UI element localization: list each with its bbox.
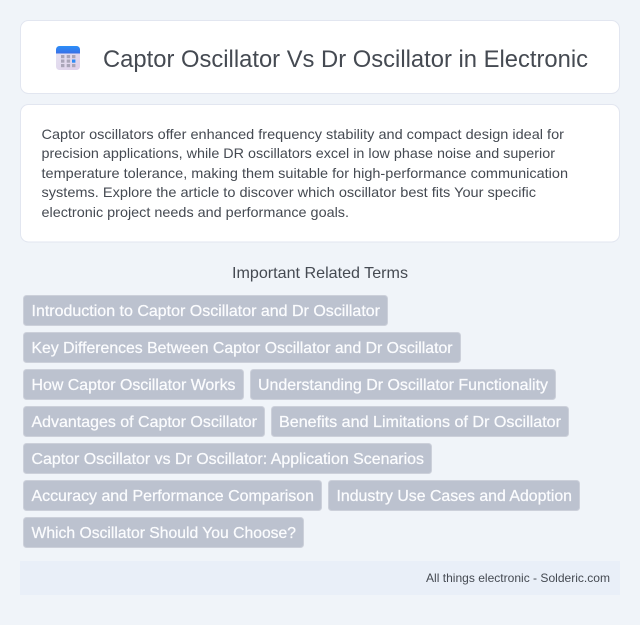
footer: All things electronic - Solderic.com: [426, 571, 610, 585]
tag: accuracy and performance: [24, 480, 322, 510]
tag: benefits and limitations: [272, 406, 568, 436]
footer: [20, 561, 620, 595]
tag: how captor works: [24, 370, 244, 400]
panel: related term tags: [24, 296, 580, 548]
tag: introduction: [24, 296, 388, 326]
text block: summary paragraph: electronic project needs and performance goals.: [42, 204, 349, 220]
panel: summary: [20, 104, 620, 242]
tag: which oscillator: [24, 518, 304, 548]
tag: advantages: Advantages of Captor Oscillator: [32, 414, 258, 431]
tag: industry use cases: [328, 480, 580, 510]
panel: header: [20, 20, 620, 94]
tag: how captor works: How Captor Oscillator Works: [32, 377, 236, 394]
tag: introduction: Introduction to Captor Oscillator and Dr Oscillator: [32, 303, 381, 320]
text block: summary paragraph: Captor oscillators offer enhanced frequency stability and compact design ideal for: [42, 126, 564, 142]
tag: dr functionality: [250, 370, 556, 400]
tag: which oscillator: Which Oscillator Should You Choose?: [32, 525, 296, 542]
tag: application scenarios: [24, 444, 432, 474]
tag: key differences: Key Differences Between Captor Oscillator and Dr Oscillator: [32, 340, 453, 357]
tag: accuracy and performance: Accuracy and Performance Comparison: [32, 488, 314, 505]
text block: summary paragraph: precision applications, while DR oscillators excel in low phase noise and superior: [42, 145, 555, 161]
tag: benefits and limitations: Benefits and Limitations of Dr Oscillator: [279, 414, 562, 431]
tag: application scenarios: Captor Oscillator vs Dr Oscillator: Application Scenarios: [32, 451, 424, 468]
text block: summary paragraph: systems. Explore the article to discover which oscillator best fits Your specific: [42, 184, 536, 200]
heading: important related terms: Important Related Terms: [232, 265, 408, 282]
tag: dr functionality: Understanding Dr Oscillator Functionality: [258, 377, 548, 394]
tag: key differences: [24, 332, 460, 362]
text block: summary paragraph: temperature tolerance, making them suitable for high-performance communication: [42, 165, 568, 181]
title: Captor Oscillator Vs Dr Oscillator in Electronic: [103, 46, 588, 73]
tag: advantages: [24, 406, 264, 436]
text block: summary paragraph: [42, 126, 568, 220]
icon: calendar grid: [56, 46, 80, 70]
tag: industry use cases: Industry Use Cases and Adoption: [336, 488, 572, 505]
